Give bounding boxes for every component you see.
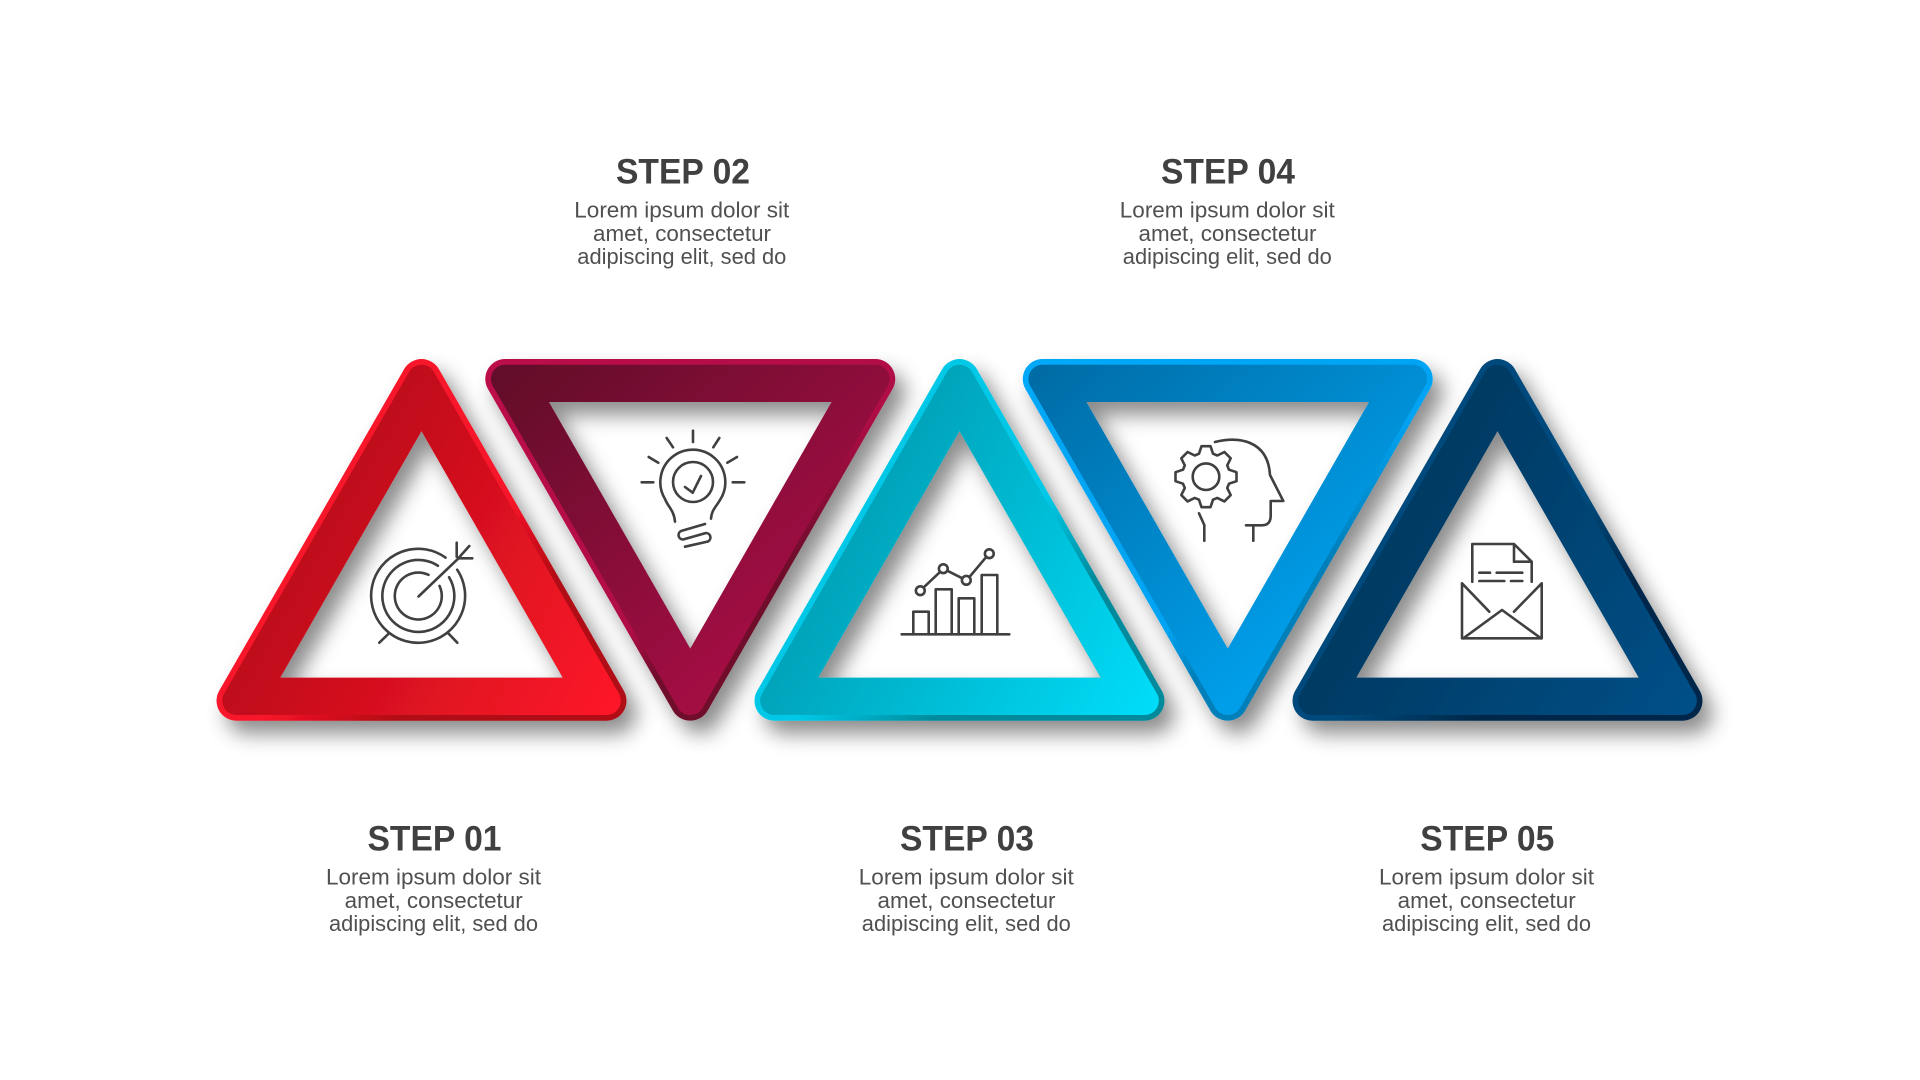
step 05 triangle band	[1293, 359, 1702, 721]
panel: step 01 triangle	[217, 359, 626, 721]
icon: bar chart with trend line	[902, 549, 1009, 634]
text block: step 04: amet, consectetur	[1138, 221, 1316, 246]
icon: open envelope with letter	[1462, 544, 1542, 638]
text block: step 04	[1120, 152, 1335, 269]
text block: step 04: STEP 04	[1161, 152, 1296, 191]
text block: step 01	[326, 819, 541, 936]
text block: step 03: Lorem ipsum dolor sit	[859, 865, 1074, 890]
panel: step 03 triangle	[755, 359, 1164, 721]
text block: step 02: STEP 02	[616, 152, 750, 191]
text block: step 02	[574, 152, 789, 269]
panel: step 02 triangle	[485, 359, 895, 721]
text block: step 03: amet, consectetur	[878, 888, 1056, 913]
text block: step 01: Lorem ipsum dolor sit	[326, 865, 541, 890]
text block: step 02: Lorem ipsum dolor sit	[574, 198, 789, 223]
text block: step 05: STEP 05	[1420, 819, 1554, 858]
text block: step 01: STEP 01	[368, 819, 502, 858]
text block: step 05: Lorem ipsum dolor sit	[1379, 865, 1594, 890]
icon: target with arrow	[371, 543, 472, 643]
panel: step 05 triangle	[1293, 359, 1702, 721]
icon: light bulb with check	[642, 431, 744, 547]
text block: step 02: adipiscing elit, sed do	[577, 244, 786, 269]
text block: step 05: adipiscing elit, sed do	[1382, 911, 1591, 936]
text block: step 04: Lorem ipsum dolor sit	[1120, 198, 1335, 223]
text block: step 05: amet, consectetur	[1398, 888, 1576, 913]
step 01 triangle band	[217, 359, 626, 721]
text block: step 03	[859, 819, 1074, 936]
text block: step 02: amet, consectetur	[593, 221, 771, 246]
text block: step 03: adipiscing elit, sed do	[862, 911, 1071, 936]
text block: step 01: adipiscing elit, sed do	[329, 911, 538, 936]
text block: step 01: amet, consectetur	[345, 888, 523, 913]
text block: step 05	[1379, 819, 1594, 936]
step 04 triangle band	[1023, 359, 1433, 721]
icon: head with gear	[1176, 440, 1283, 541]
panel: step 04 triangle	[1023, 359, 1433, 721]
step 02 triangle band	[485, 359, 895, 721]
text block: step 04: adipiscing elit, sed do	[1123, 244, 1332, 269]
step 03 triangle band	[755, 359, 1164, 721]
text block: step 03: STEP 03	[900, 819, 1034, 858]
